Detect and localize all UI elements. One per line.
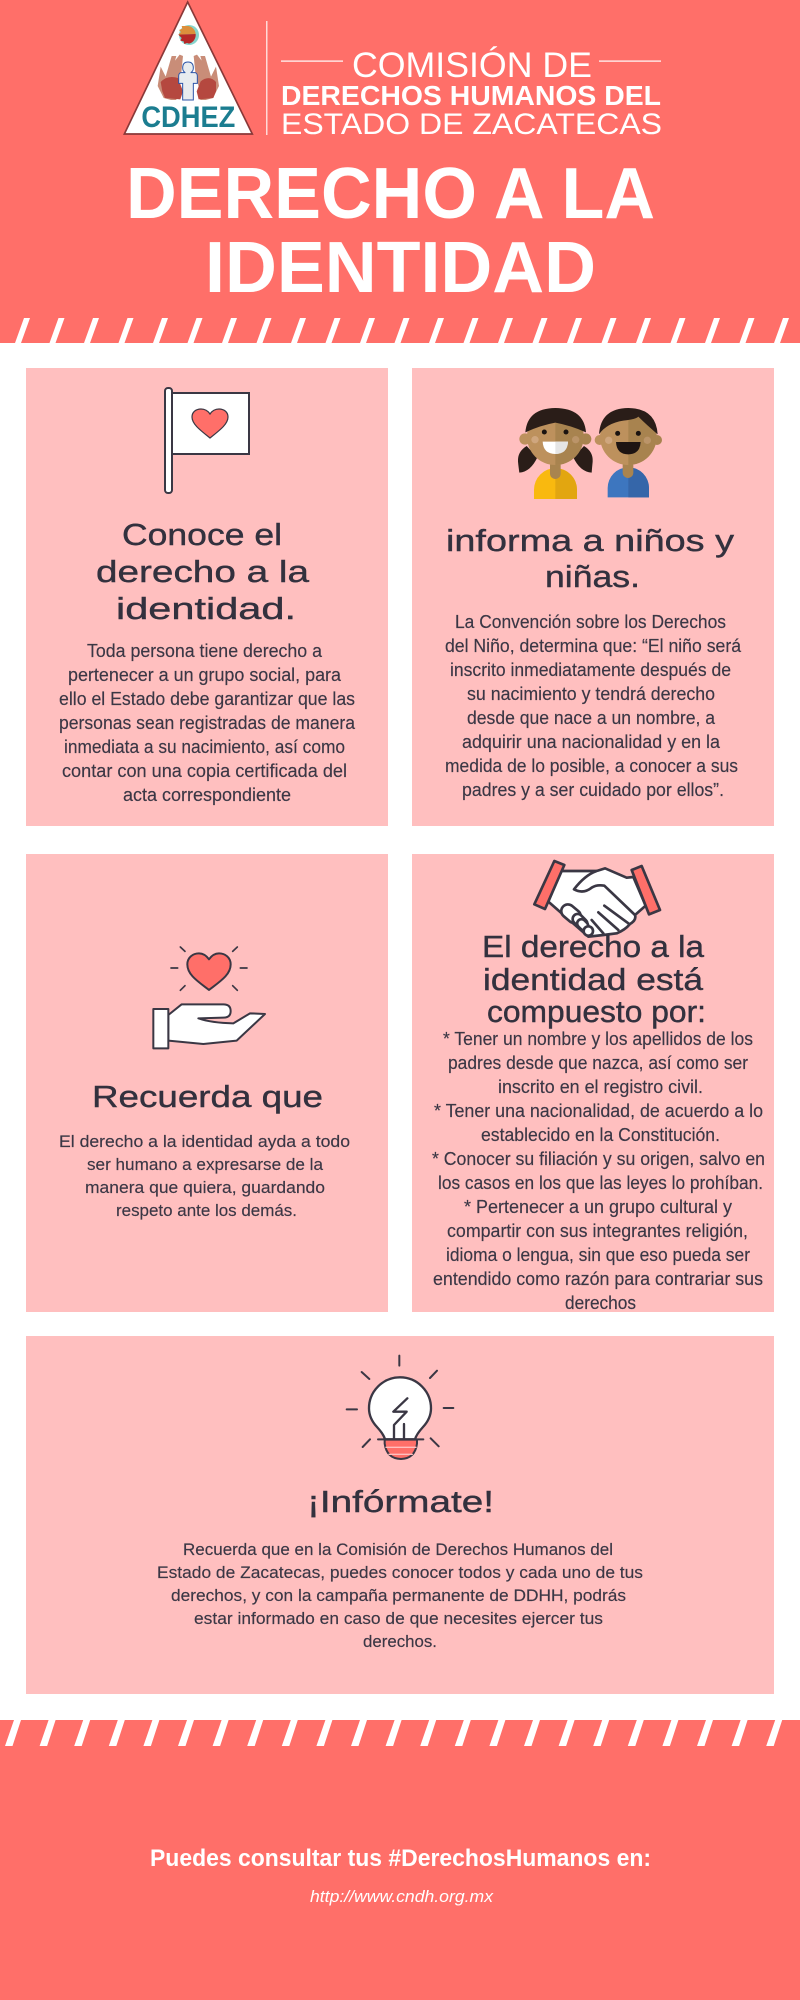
body text: padres y a ser cuidado por ellos”.	[462, 780, 724, 800]
body text: los casos en los que las leyes lo prohíban.	[438, 1173, 763, 1193]
heading	[446, 523, 735, 594]
body text: personas sean registradas de manera	[59, 713, 356, 733]
body text: contar con una copia certificada del	[62, 761, 347, 781]
panel: infórmate	[26, 1336, 774, 1694]
body text: El derecho a la identidad ayda a todo	[59, 1132, 350, 1151]
body text: * Conocer su filiación y su origen, salvo en	[432, 1149, 765, 1169]
body text	[157, 1540, 643, 1651]
body text: derechos	[565, 1293, 636, 1313]
body text	[432, 1029, 765, 1313]
body text: derechos, y con la campaña permanente de DDHH, podrás	[171, 1586, 626, 1605]
logo: CDHEZ: CDHEZ	[141, 101, 235, 134]
body text: inmediata a su nacimiento, así como	[64, 737, 345, 757]
heading: derecho a la	[96, 554, 310, 589]
heading: compuesto por:	[487, 994, 706, 1029]
organisation name	[281, 46, 662, 141]
icon: handshake	[534, 861, 660, 937]
logo: CDHEZ	[124, 2, 252, 134]
heading: ¡Infórmate!	[307, 1484, 494, 1519]
body text: derechos.	[363, 1632, 437, 1651]
heading	[482, 929, 706, 1029]
body text: compartir con sus integrantes religión,	[447, 1221, 748, 1241]
body text: su nacimiento y tendrá derecho	[467, 684, 715, 704]
body text: inscrito inmediatamente después de	[450, 660, 731, 680]
title: IDENTIDAD	[205, 228, 596, 308]
panel: recuerda que	[26, 854, 388, 1312]
title: DERECHO A LA	[126, 154, 655, 234]
icon: hand holding heart	[153, 947, 265, 1048]
panel: conoce el derecho	[26, 368, 388, 826]
body text: La Convención sobre los Derechos	[455, 612, 726, 632]
body text: acta correspondiente	[123, 785, 291, 805]
body text: pertenecer a un grupo social, para	[68, 665, 342, 685]
body text: idioma o lengua, sin que eso pueda ser	[446, 1245, 750, 1265]
body text: * Tener un nombre y los apellidos de los	[443, 1029, 753, 1049]
heading: informa a niños y	[446, 523, 735, 558]
body text	[445, 612, 742, 800]
body text: entendido como razón para contrariar sus	[433, 1269, 763, 1289]
body text: Toda persona tiene derecho a	[87, 641, 323, 661]
body text: inscrito en el registro civil.	[498, 1077, 703, 1097]
panel: informa a niños y niñas	[412, 368, 774, 826]
organisation name: COMISIÓN DE	[352, 46, 592, 85]
header band	[0, 0, 800, 343]
footer band	[0, 1720, 800, 2000]
body text: ello el Estado debe garantizar que las	[59, 689, 355, 709]
body text: * Tener una nacionalidad, de acuerdo a lo	[434, 1101, 763, 1121]
heading: Conoce el	[122, 517, 282, 552]
body text: desde que nace a un nombre, a	[467, 708, 716, 728]
body text: * Pertenecer a un grupo cultural y	[464, 1197, 732, 1217]
body text: respeto ante los demás.	[116, 1201, 297, 1220]
body text: medida de lo posible, a conocer a sus	[445, 756, 738, 776]
heading	[96, 517, 310, 626]
heading: identidad.	[116, 591, 296, 626]
body text	[59, 641, 356, 805]
footer heading: Puedes consultar tus #DerechosHumanos en:	[150, 1845, 651, 1872]
organisation name: DERECHOS HUMANOS DEL	[281, 80, 661, 111]
icon: light bulb	[347, 1356, 453, 1459]
body text: Estado de Zacatecas, puedes conocer todos y cada uno de tus	[157, 1563, 643, 1582]
heading: identidad está	[483, 962, 704, 997]
body text: estar informado en caso de que necesites ejercer tus	[194, 1609, 603, 1628]
body text: ser humano a expresarse de la	[87, 1155, 324, 1174]
body text: manera que quiera, guardando	[85, 1178, 325, 1197]
title	[126, 154, 655, 308]
heading: Recuerda que	[92, 1079, 323, 1114]
body text: adquirir una nacionalidad y en la	[462, 732, 721, 752]
body text: Recuerda que en la Comisión de Derechos Humanos del	[183, 1540, 613, 1559]
body text: padres desde que nazca, así como ser	[448, 1053, 748, 1073]
footer link: http://www.cndh.org.mx	[310, 1887, 494, 1906]
organisation name: ESTADO DE ZACATECAS	[281, 108, 662, 141]
body text	[59, 1132, 350, 1220]
icon: girl and boy	[518, 408, 662, 499]
heading: niñas.	[545, 559, 640, 594]
logo divider	[266, 21, 268, 135]
icon: flag with heart	[165, 388, 249, 493]
heading: El derecho a la	[482, 929, 705, 964]
body text: establecido en la Constitución.	[481, 1125, 720, 1145]
body text: del Niño, determina que: “El niño será	[445, 636, 742, 656]
panel: el derecho a la identidad está compuesto por	[412, 854, 774, 1313]
